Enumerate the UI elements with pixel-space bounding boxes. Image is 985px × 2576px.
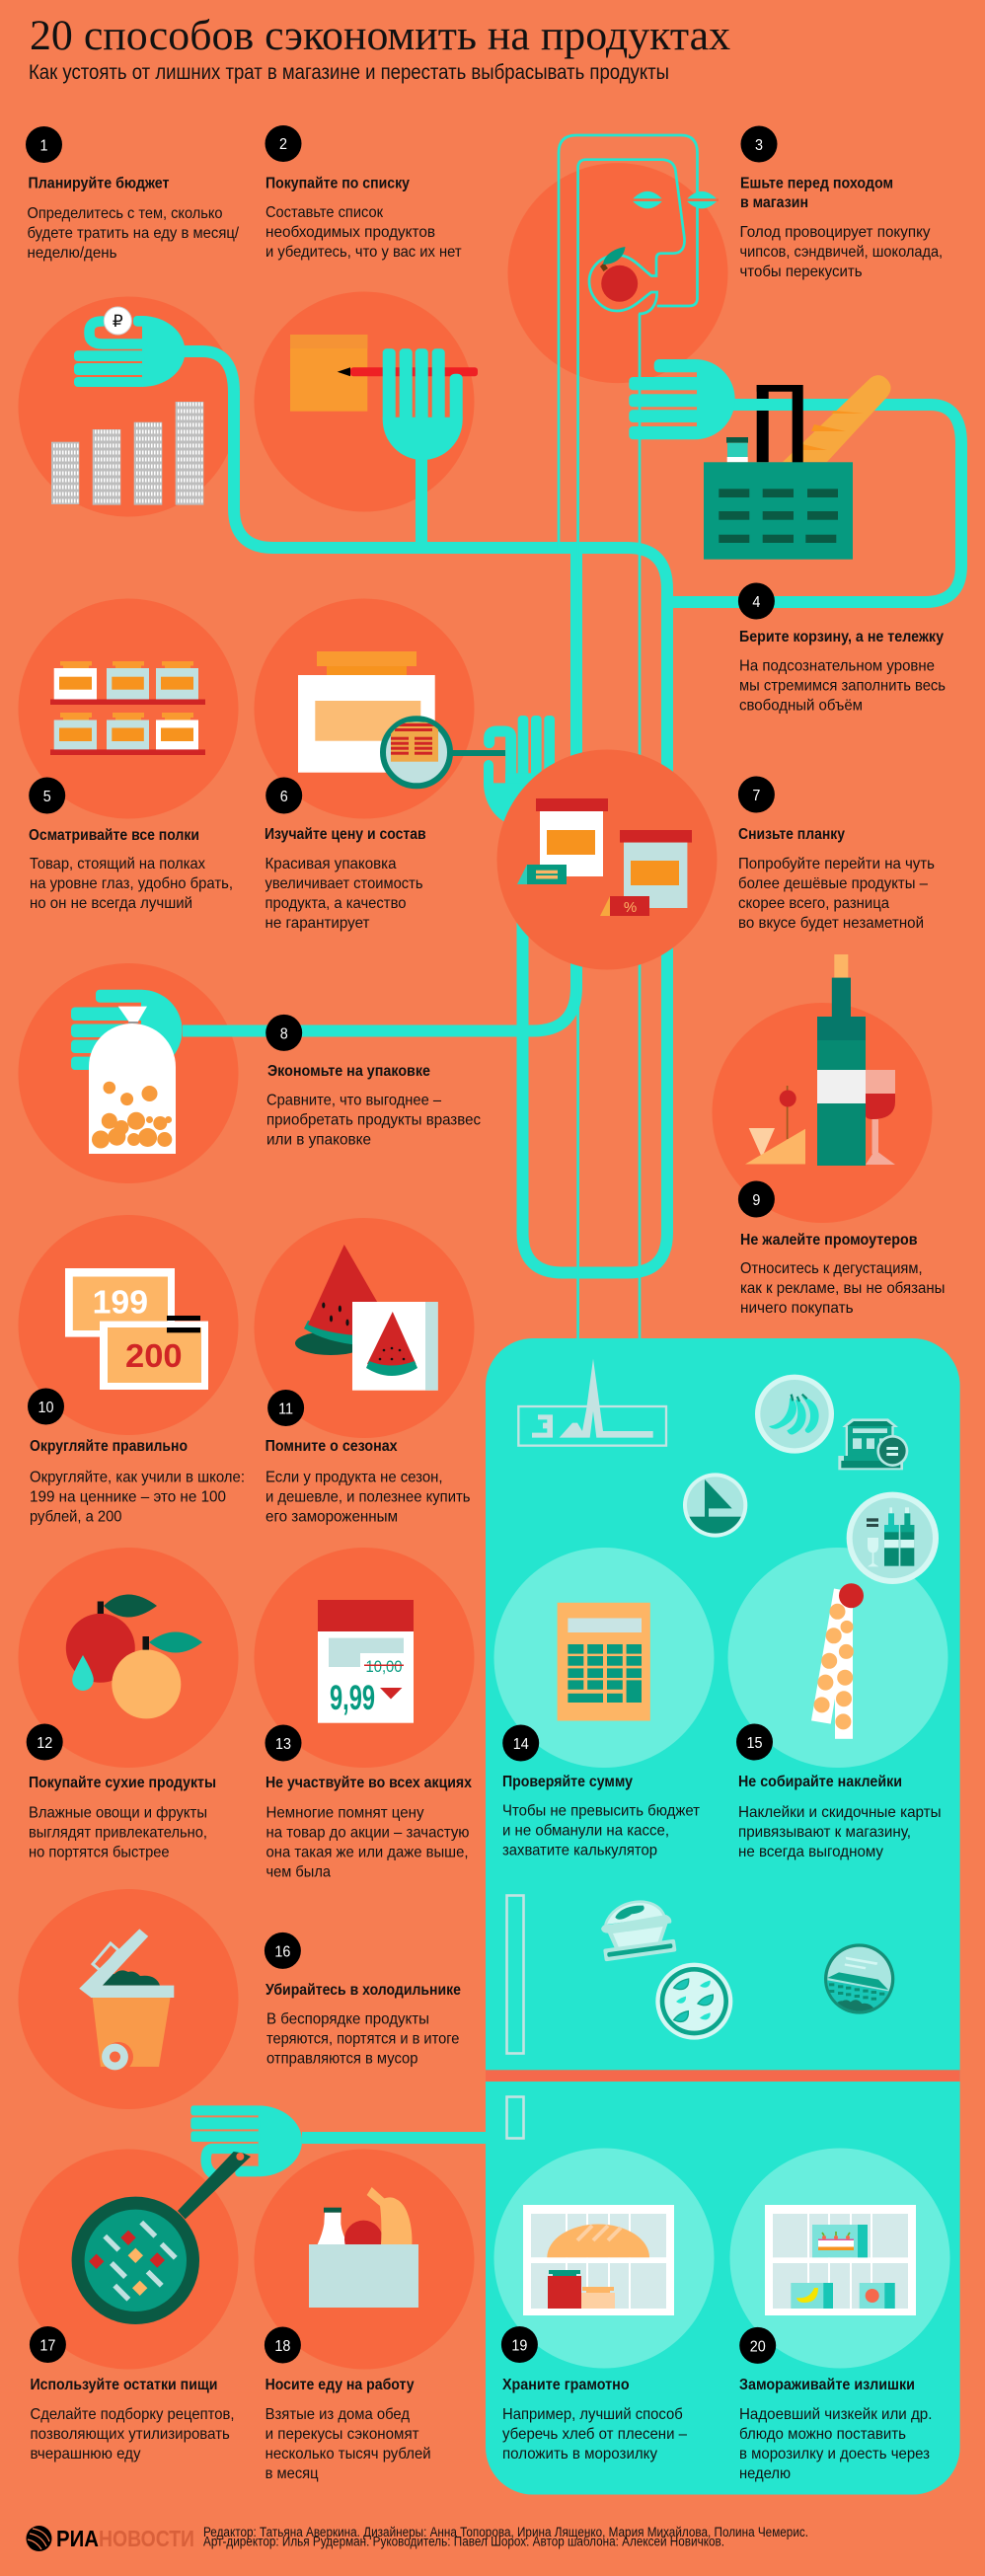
step 12: dry produce <box>27 1595 216 1861</box>
step 13: promotions <box>265 1600 472 1881</box>
text: Округляйте, как учили в школе: <box>30 1469 245 1486</box>
number 3: 3 <box>755 137 763 154</box>
number 20 <box>739 2327 776 2364</box>
text <box>29 1805 207 1861</box>
fridge magnets: top <box>518 1359 939 1584</box>
step 1: budget <box>26 126 240 504</box>
illustration 3: face with apple <box>600 191 719 302</box>
heading: в магазин <box>740 194 808 211</box>
icon: price tag <box>517 865 567 884</box>
text: чтобы перекусить <box>740 264 863 280</box>
number 5 <box>29 778 65 813</box>
number 11: 11 <box>278 1402 293 1417</box>
number 3 <box>740 126 778 162</box>
text: Надоевший чизкейк или др. <box>739 2406 932 2423</box>
number 10 <box>28 1388 64 1425</box>
heading: Носите еду на работу <box>265 2377 415 2393</box>
icon: trash bin <box>79 1929 174 2072</box>
number 17 <box>30 2326 66 2363</box>
text: и не обманули на кассе, <box>502 1822 669 1840</box>
text <box>502 1802 701 1859</box>
step 19: storage <box>501 2205 687 2462</box>
text: но портятся быстрее <box>29 1845 170 1861</box>
fridge divider <box>486 2070 960 2082</box>
text: Красивая упаковка <box>265 856 397 872</box>
magnet: wine <box>847 1492 939 1584</box>
number 11 <box>267 1390 304 1426</box>
icon: price tag 200: 200 <box>125 1337 183 1374</box>
number 18: 18 <box>274 2338 290 2355</box>
text: теряются, портятся и в итоге <box>266 2030 459 2047</box>
text <box>30 856 233 912</box>
eye <box>632 191 663 208</box>
step 18: lunch at work <box>265 2187 431 2482</box>
icon: note and pencil in hand <box>290 335 478 460</box>
subtitle: Как устоять от лишних трат в магазине и перестать выбрасывать продукты <box>29 61 669 84</box>
step 5: shelves <box>29 661 233 912</box>
number 14: 14 <box>513 1736 529 1753</box>
text <box>740 224 943 280</box>
magnet: sailboat <box>683 1473 747 1538</box>
title: 20 способов сэкономить на продуктах <box>30 13 730 59</box>
text <box>739 657 946 715</box>
text: Наклейки и скидочные карты <box>738 1804 942 1821</box>
text <box>30 2406 235 2462</box>
footer: logo <box>26 2526 194 2551</box>
number 1: 1 <box>39 138 48 154</box>
text <box>266 1805 470 1881</box>
text <box>265 204 462 261</box>
icon: discount tag <box>600 896 649 916</box>
icon: bottle <box>726 437 748 462</box>
text: не гарантирует <box>265 915 370 932</box>
text <box>502 2406 687 2462</box>
number 14 <box>502 1725 539 1761</box>
number 19 <box>501 2326 538 2363</box>
fridge magnets: bottom <box>601 1902 894 2040</box>
text: в морозилку и доесть через <box>739 2446 930 2462</box>
footer: credits <box>203 2525 808 2548</box>
light circles 15, 19, 20 <box>493 1548 949 2369</box>
icon: hand with bag <box>71 990 183 1154</box>
text: Сравните, что выгоднее – <box>266 1093 441 1109</box>
number 15: 15 <box>746 1735 763 1752</box>
step 8: packaging <box>71 990 481 1154</box>
heading <box>740 175 893 211</box>
text: на товар до акции – зачастую <box>266 1825 470 1842</box>
text: На подсознательном уровне <box>739 657 935 675</box>
text: Товар, стоящий на полках <box>30 856 205 872</box>
icon: hand holding ruble coin <box>74 307 186 387</box>
icon: magnifier <box>383 719 505 786</box>
number 4: 4 <box>752 594 760 611</box>
icon: globe <box>26 2526 51 2551</box>
text <box>28 205 240 262</box>
icon: freezer with boxes <box>765 2205 916 2315</box>
icon: jar white <box>536 798 608 876</box>
text: Определитесь с тем, сколько <box>28 205 223 222</box>
text: на уровне глаз, удобно брать, <box>30 875 233 892</box>
heading: Проверяйте сумму <box>502 1774 633 1790</box>
number 9 <box>738 1180 775 1218</box>
thin face and esophagus lines <box>559 135 697 1338</box>
circle over pipes <box>497 750 717 969</box>
text <box>30 1469 245 1526</box>
icon: price tag with discount: 10,00 <box>365 1657 403 1676</box>
text: и убедитесь, что у вас их нет <box>265 244 462 261</box>
icon: price tag 200 <box>100 1316 208 1390</box>
magnet: logo with spike <box>518 1359 666 1446</box>
number 6 <box>265 778 302 813</box>
text <box>265 856 422 932</box>
icon: jars on shelves <box>50 661 205 755</box>
magnet: citrus slices <box>655 1963 732 2040</box>
number 2 <box>265 125 302 162</box>
number 16: 16 <box>274 1943 290 1960</box>
icon: baguette <box>783 375 891 462</box>
text: Голод провоцирует покупку <box>740 224 930 241</box>
eye <box>686 191 718 208</box>
icon: hand with pipe <box>629 359 799 439</box>
text: Например, лучший способ <box>502 2406 683 2423</box>
heading: Не собирайте наклейки <box>738 1774 902 1790</box>
text: скорее всего, разница <box>738 895 889 912</box>
text: она такая же или даже выше, <box>266 1845 468 1861</box>
footer: credits: Арт-директор: Илья Рудерман. Руководитель: Павел Шорох. Автор шаблона: Алексей Новичков. <box>203 2535 724 2548</box>
number 10: 10 <box>38 1400 54 1416</box>
icon: watermelon <box>295 1245 395 1355</box>
text <box>740 1260 946 1317</box>
heading: Помните о сезонах <box>265 1438 398 1455</box>
text: но он не всегда лучший <box>30 895 192 912</box>
icon: discount tag: % <box>624 899 637 916</box>
step 15: stickers <box>736 1583 942 1860</box>
footer: credits: Редактор: Татьяна Аверкина. Дизайнеры: Анна Топорова, Ирина Лященко, Мария Михайлова, Полина Чемерис. <box>203 2525 808 2539</box>
heading: Округляйте правильно <box>30 1438 188 1455</box>
text: выглядят привлекательно, <box>29 1825 207 1842</box>
text <box>266 2010 459 2067</box>
text: блюдо можно поставить <box>739 2426 906 2443</box>
number 4 <box>738 582 775 620</box>
step 14: calculator <box>502 1603 701 1859</box>
step 2: shopping list <box>265 125 478 460</box>
text: неделю/день <box>28 245 116 262</box>
number 18 <box>265 2327 301 2363</box>
number 8: 8 <box>280 1025 288 1042</box>
text: Взятые из дома обед <box>265 2406 411 2423</box>
text: Попробуйте перейти на чуть <box>738 856 935 872</box>
text <box>266 1093 481 1149</box>
number 12: 12 <box>37 1735 52 1752</box>
magnet: shop <box>838 1418 908 1470</box>
icon: price tag 199 <box>65 1268 175 1337</box>
step 7: lower the bar <box>497 750 935 969</box>
text: Немногие помнят цену <box>266 1805 424 1822</box>
number 7 <box>738 776 775 813</box>
text: В беспорядке продукты <box>266 2010 429 2027</box>
connecting pipes <box>183 351 961 2138</box>
icon: calculator <box>558 1603 650 1721</box>
text <box>738 856 935 932</box>
wordmark: РИА <box>56 2526 99 2551</box>
heading: Не участвуйте во всех акциях <box>265 1775 472 1791</box>
step 17: leftovers <box>30 2105 302 2462</box>
text: будете тратить на еду в месяц/ <box>28 225 240 242</box>
magnet: hotel building <box>824 1943 894 2016</box>
icon: pan with food <box>72 2197 199 2324</box>
step 16: clean fridge <box>79 1929 461 2072</box>
number 20: 20 <box>750 2338 766 2355</box>
text: увеличивает стоимость <box>265 875 422 892</box>
text: более дешёвые продукты – <box>738 875 928 892</box>
text: Составьте список <box>265 204 384 221</box>
light circle 14 <box>493 1548 715 1768</box>
fridge upper handle <box>507 1895 523 2053</box>
icon: handle left <box>757 385 769 462</box>
magnet: pie <box>601 1902 677 1961</box>
icon: apple and orange <box>66 1595 202 1718</box>
icon: hand <box>484 716 556 826</box>
apple <box>601 265 638 302</box>
icon: handle right <box>757 385 803 477</box>
text: продукта, а качество <box>265 895 407 912</box>
text: приобретать продукты вразвес <box>266 1112 481 1129</box>
number 17: 17 <box>39 2337 55 2355</box>
heading: Изучайте цену и состав <box>265 826 426 843</box>
text: или в упаковке <box>266 1132 371 1149</box>
background circles behind illustrations <box>18 163 932 2369</box>
text: и перекусы сэкономят <box>265 2426 419 2443</box>
icon: price tag with discount <box>318 1600 414 1723</box>
text: уберечь хлеб от плесени – <box>502 2426 687 2443</box>
icon: price tag with discount: 9,99 <box>330 1679 375 1717</box>
text: Влажные овощи и фрукты <box>29 1805 207 1822</box>
text: мы стремимся заполнить весь <box>739 677 946 695</box>
icon: freezer with bread <box>523 2205 674 2315</box>
text: рублей, а 200 <box>30 1508 122 1526</box>
heading: Осматривайте все полки <box>29 827 199 844</box>
text: как к рекламе, вы не обязаны <box>740 1280 946 1297</box>
text: в месяц <box>265 2465 319 2482</box>
step 6: price and ingredients <box>265 651 556 932</box>
number 8 <box>265 1015 302 1051</box>
icon: wine bottle <box>817 954 866 1166</box>
heading: Используйте остатки пищи <box>30 2377 217 2393</box>
text <box>265 1469 470 1526</box>
number 9: 9 <box>752 1192 760 1209</box>
number 2: 2 <box>279 136 287 153</box>
text: Чтобы не превысить бюджет <box>502 1802 701 1820</box>
text: неделю <box>739 2465 791 2482</box>
text <box>265 2406 431 2482</box>
step 3: eat before shopping <box>740 126 943 280</box>
text: вчерашнюю еду <box>30 2446 140 2462</box>
number 1 <box>26 126 62 163</box>
fridge lower handle <box>507 2096 523 2138</box>
icon: sticker strips <box>811 1583 864 1739</box>
icon: wine glass <box>866 1070 895 1165</box>
step 10: rounding <box>28 1268 245 1526</box>
heading: Ешьте перед походом <box>740 175 893 191</box>
heading: Замораживайте излишки <box>739 2377 915 2393</box>
icon: jar <box>298 651 435 773</box>
icon: frozen pack <box>352 1302 438 1391</box>
step 20: freeze leftovers <box>739 2205 932 2482</box>
text: Сделайте подборку рецептов, <box>30 2406 235 2423</box>
text: Если у продукта не сезон, <box>265 1469 442 1486</box>
number 6: 6 <box>280 789 288 805</box>
panel: green fridge <box>486 1338 960 2495</box>
icon: jar blue <box>620 830 692 908</box>
heading: Берите корзину, а не тележку <box>739 629 944 645</box>
icon: hand holding ruble coin: ₽ <box>113 312 123 331</box>
number 19: 19 <box>511 2337 527 2355</box>
heading: Покупайте сухие продукты <box>29 1775 216 1791</box>
heading: Не жалейте промоутеров <box>740 1232 918 1249</box>
text: захватите калькулятор <box>502 1842 657 1859</box>
text: несколько тысяч рублей <box>265 2446 431 2462</box>
text: отправляются в мусор <box>266 2050 417 2067</box>
text: и дешевле, и полезнее купить <box>265 1488 470 1506</box>
text: свободный объём <box>739 697 863 715</box>
wordmark: НОВОСТИ <box>99 2526 194 2551</box>
heading: Планируйте бюджет <box>28 176 170 192</box>
text: 199 на ценнике – это не 100 <box>30 1488 226 1506</box>
number 13 <box>265 1725 302 1761</box>
heading: Покупайте по списку <box>265 176 410 192</box>
text: ничего покупать <box>740 1300 854 1317</box>
text: во вкусе будет незаметной <box>738 915 924 932</box>
text: не всегда выгодному <box>738 1844 883 1860</box>
text <box>738 1804 942 1860</box>
icon: price tag 199: 199 <box>93 1283 148 1321</box>
number 13: 13 <box>275 1736 291 1753</box>
heading: Экономьте на упаковке <box>267 1063 430 1080</box>
icon: basket <box>704 462 853 560</box>
icon: lunch box <box>309 2187 418 2308</box>
number 5: 5 <box>43 789 51 805</box>
text: положить в морозилку <box>502 2446 657 2462</box>
text: привязывают к магазину, <box>738 1824 911 1841</box>
number 12 <box>27 1723 63 1761</box>
magnet: bananas <box>755 1375 834 1454</box>
icon: cheese <box>745 1086 805 1165</box>
text: его замороженным <box>265 1508 398 1526</box>
step 4: basket <box>629 359 946 715</box>
heading: Снизьте планку <box>738 826 845 843</box>
icon: hand holding frying pan <box>178 2105 302 2219</box>
heading: Убирайтесь в холодильнике <box>265 1982 461 1999</box>
text: Относитесь к дегустациям, <box>740 1260 923 1277</box>
number 16 <box>265 1932 301 1969</box>
icon: coin stacks <box>51 402 203 504</box>
number 15 <box>736 1723 773 1761</box>
number 7: 7 <box>752 788 760 804</box>
text: чипсов, сэндвичей, шоколада, <box>740 244 943 261</box>
step 9: promoters <box>738 954 946 1317</box>
heading: Храните грамотно <box>502 2377 630 2393</box>
text: необходимых продуктов <box>265 224 435 241</box>
text <box>739 2406 932 2482</box>
text: чем была <box>266 1864 331 1881</box>
text: позволяющих утилизировать <box>30 2426 230 2443</box>
step 11: seasons <box>265 1245 470 1526</box>
